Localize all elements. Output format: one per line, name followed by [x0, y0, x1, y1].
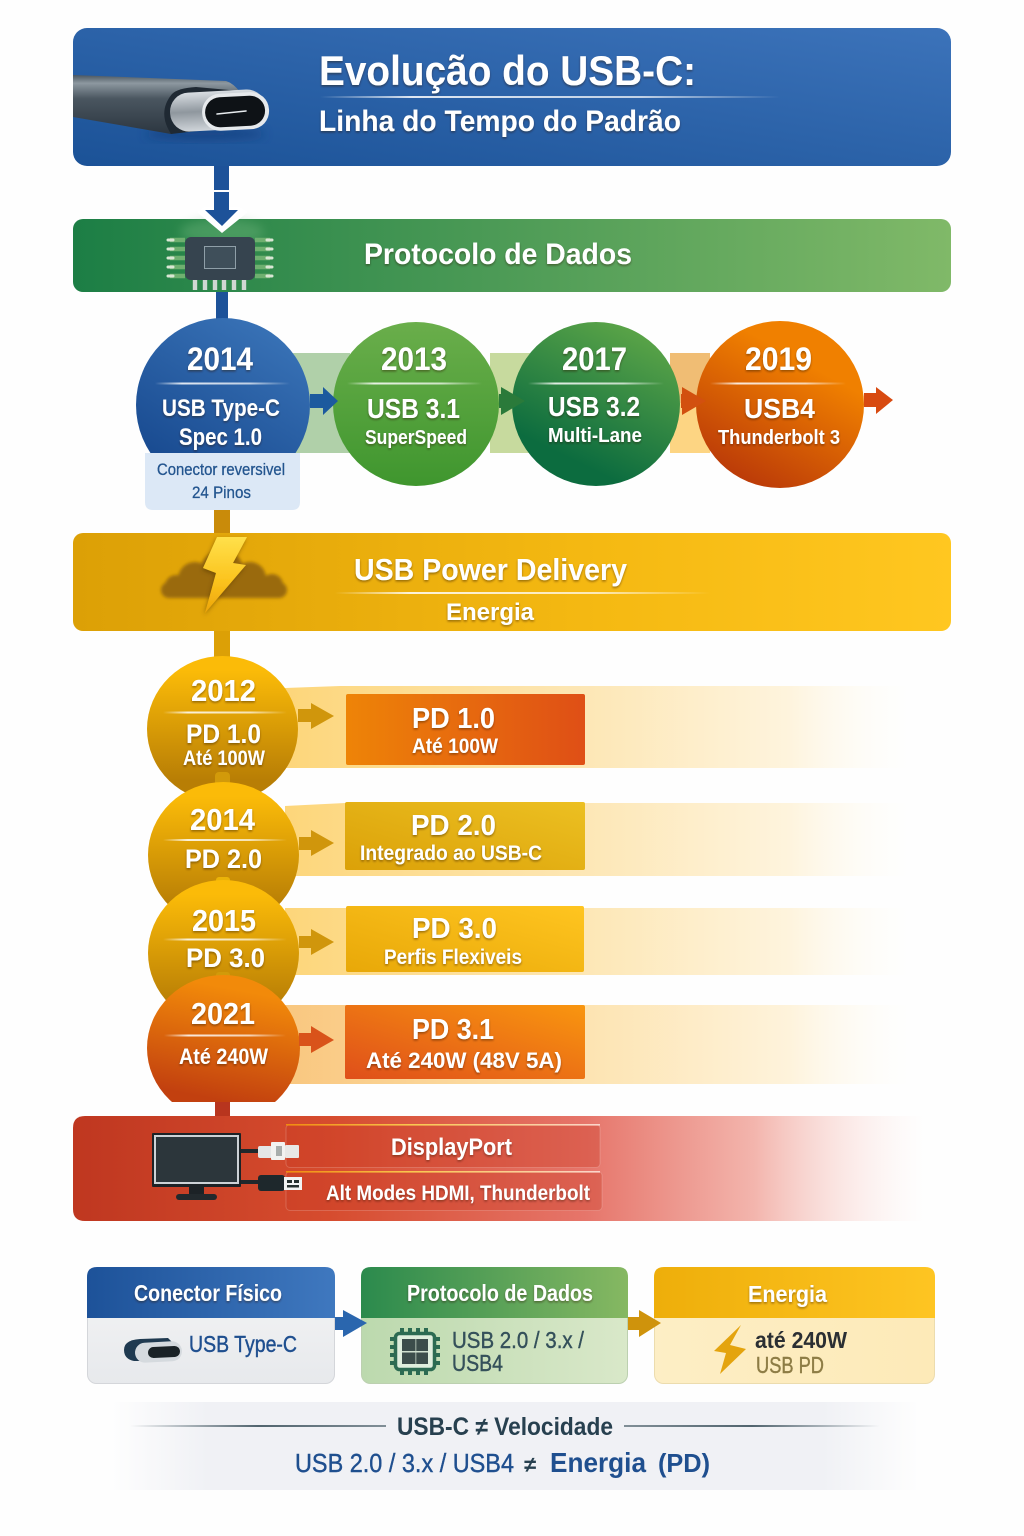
summary card: Protocolo de Dados: USB4: [452, 1350, 503, 1376]
node: 2013 USB 3.1: SuperSpeed: [365, 427, 467, 449]
node: 2019 USB4: Thunderbolt 3: [718, 427, 840, 449]
statement: USB versions are not power: [295, 1447, 710, 1478]
band: DisplayPort: [73, 1116, 925, 1221]
card: PD 3.0: [346, 906, 584, 972]
node: 2021 Até 240W: 2021: [191, 996, 255, 1031]
arrows: summary cards: [335, 1310, 661, 1337]
summary card: Protocolo de Dados: [361, 1267, 628, 1384]
node: 2013 USB 3.1: 2013: [381, 341, 447, 377]
connector: PD stem: [214, 631, 230, 661]
summary card: Energia: até 240W: [755, 1327, 847, 1353]
row bands: [285, 686, 915, 1084]
node: 2013 USB 3.1: [333, 322, 499, 486]
statement: USB versions are not power: Energia: [550, 1447, 646, 1478]
summary card: Energia: USB PD: [756, 1352, 824, 1378]
title: Evolução do USB-C:: [319, 47, 696, 94]
panel: Alt Modes: Alt Modes HDMI, Thunderbolt: [326, 1182, 590, 1205]
summary card: Conector Físico: [87, 1267, 335, 1384]
card: PD 3.1: PD 3.1: [412, 1014, 494, 1046]
card: PD 2.0: [345, 802, 585, 870]
card: PD 1.0: [346, 694, 585, 765]
icon: chip: [168, 237, 272, 290]
icon: arrow head over band: [197, 192, 248, 233]
summary card: Protocolo de Dados: USB 2.0 / 3.x /: [452, 1327, 585, 1353]
subheading: Energia: [446, 599, 535, 626]
node: 2014 USB Type-C: Spec 1.0: [179, 424, 262, 451]
card: PD 2.0: PD 2.0: [411, 810, 496, 842]
node: 2015 PD 3.0: [148, 880, 299, 1026]
card: PD 3.0: Perfis Flexiveis: [384, 946, 522, 969]
panel: DisplayPort: [286, 1124, 600, 1168]
callout: Conector reversivel: 24 Pinos: [192, 483, 251, 502]
icon: monitor with connectors: [152, 1133, 302, 1200]
callout: Conector reversivel: [145, 453, 300, 510]
node: 2017 USB 3.2: [512, 322, 680, 486]
node: 2012 PD 1.0: 2012: [191, 673, 256, 708]
node: 2012 PD 1.0: [147, 656, 298, 802]
arrows: PD rows: [298, 703, 334, 1053]
heading: Protocolo de Dados: [364, 238, 632, 271]
statement: USB versions are not power: USB 2.0 / 3.x / USB4: [295, 1448, 514, 1478]
icon: green chip: [390, 1328, 440, 1375]
statement: USB versions are not power: ≠: [524, 1452, 536, 1477]
summary card: Energia: Energia: [748, 1281, 827, 1307]
summary card: Conector Físico: USB Type-C: [189, 1331, 297, 1357]
node: 2012 PD 1.0: PD 1.0: [186, 719, 261, 749]
node: 2021 Até 240W: Até 240W: [179, 1044, 268, 1069]
summary card: Energia: [654, 1267, 935, 1384]
heading: USB Power Delivery: [354, 552, 628, 587]
backdrop band: data timeline: [290, 353, 710, 453]
node: 2014 USB Type-C: [136, 318, 310, 453]
node: 2014 PD 2.0: PD 2.0: [185, 844, 262, 874]
band: USB Power Delivery: [73, 533, 951, 631]
statement: USB-C is not speed: USB-C ≠ Velocidade: [397, 1413, 613, 1441]
node: 2014 PD 2.0: [148, 782, 299, 928]
node: 2015 PD 3.0: 2015: [192, 903, 256, 938]
connector arrow: header to data band: [214, 166, 229, 211]
card: PD 1.0: Até 100W: [412, 735, 498, 758]
summary card: Conector Físico: Conector Físico: [134, 1280, 282, 1306]
footer note: [110, 1402, 920, 1490]
icon: cloud and lightning bolt: [161, 537, 287, 613]
node: 2019 USB4: 2019: [745, 341, 812, 377]
icon: small USB-C plug: [124, 1338, 182, 1363]
node: 2017 USB 3.2: Multi-Lane: [548, 425, 642, 447]
node: 2012 PD 1.0: Até 100W: [183, 747, 265, 770]
card: PD 3.0: PD 3.0: [412, 913, 497, 945]
connector: DisplayPort stem: [215, 1102, 230, 1117]
callout: Conector reversivel: Conector reversivel: [157, 460, 285, 479]
card: PD 3.1: [345, 1005, 585, 1079]
node: 2014 PD 2.0: 2014: [190, 802, 256, 837]
node: 2014 USB Type-C: 2014: [187, 341, 253, 377]
header banner: [73, 28, 951, 166]
subtitle: Linha do Tempo do Padrão: [319, 105, 681, 138]
node: 2013 USB 3.1: USB 3.1: [367, 393, 460, 424]
icon: lightning bolt: [714, 1325, 746, 1374]
band: Protocolo de Dados: [73, 219, 951, 292]
node: 2021 Até 240W: [147, 975, 300, 1102]
card: PD 3.1: Até 240W (48V 5A): [366, 1048, 562, 1073]
icon: USB-C connector: [73, 75, 270, 140]
node: 2019 USB4: USB4: [744, 393, 815, 424]
card: PD 2.0: Integrado ao USB-C: [360, 842, 542, 865]
node: 2015 PD 3.0: PD 3.0: [186, 943, 265, 973]
node: 2017 USB 3.2: USB 3.2: [548, 391, 640, 422]
card: PD 1.0: PD 1.0: [412, 703, 495, 735]
panel: Alt Modes: [286, 1171, 602, 1210]
summary card: Protocolo de Dados: Protocolo de Dados: [407, 1280, 593, 1306]
statement: USB versions are not power: (PD): [658, 1448, 710, 1478]
node: 2014 USB Type-C: USB Type-C: [162, 395, 280, 422]
node: 2019 USB4: [696, 321, 864, 488]
node: 2017 USB 3.2: 2017: [562, 341, 627, 377]
connector: data stem: [216, 292, 228, 322]
connector: power stem: [214, 510, 230, 534]
arrows: data timeline: [310, 387, 893, 415]
panel: DisplayPort: DisplayPort: [391, 1134, 512, 1161]
